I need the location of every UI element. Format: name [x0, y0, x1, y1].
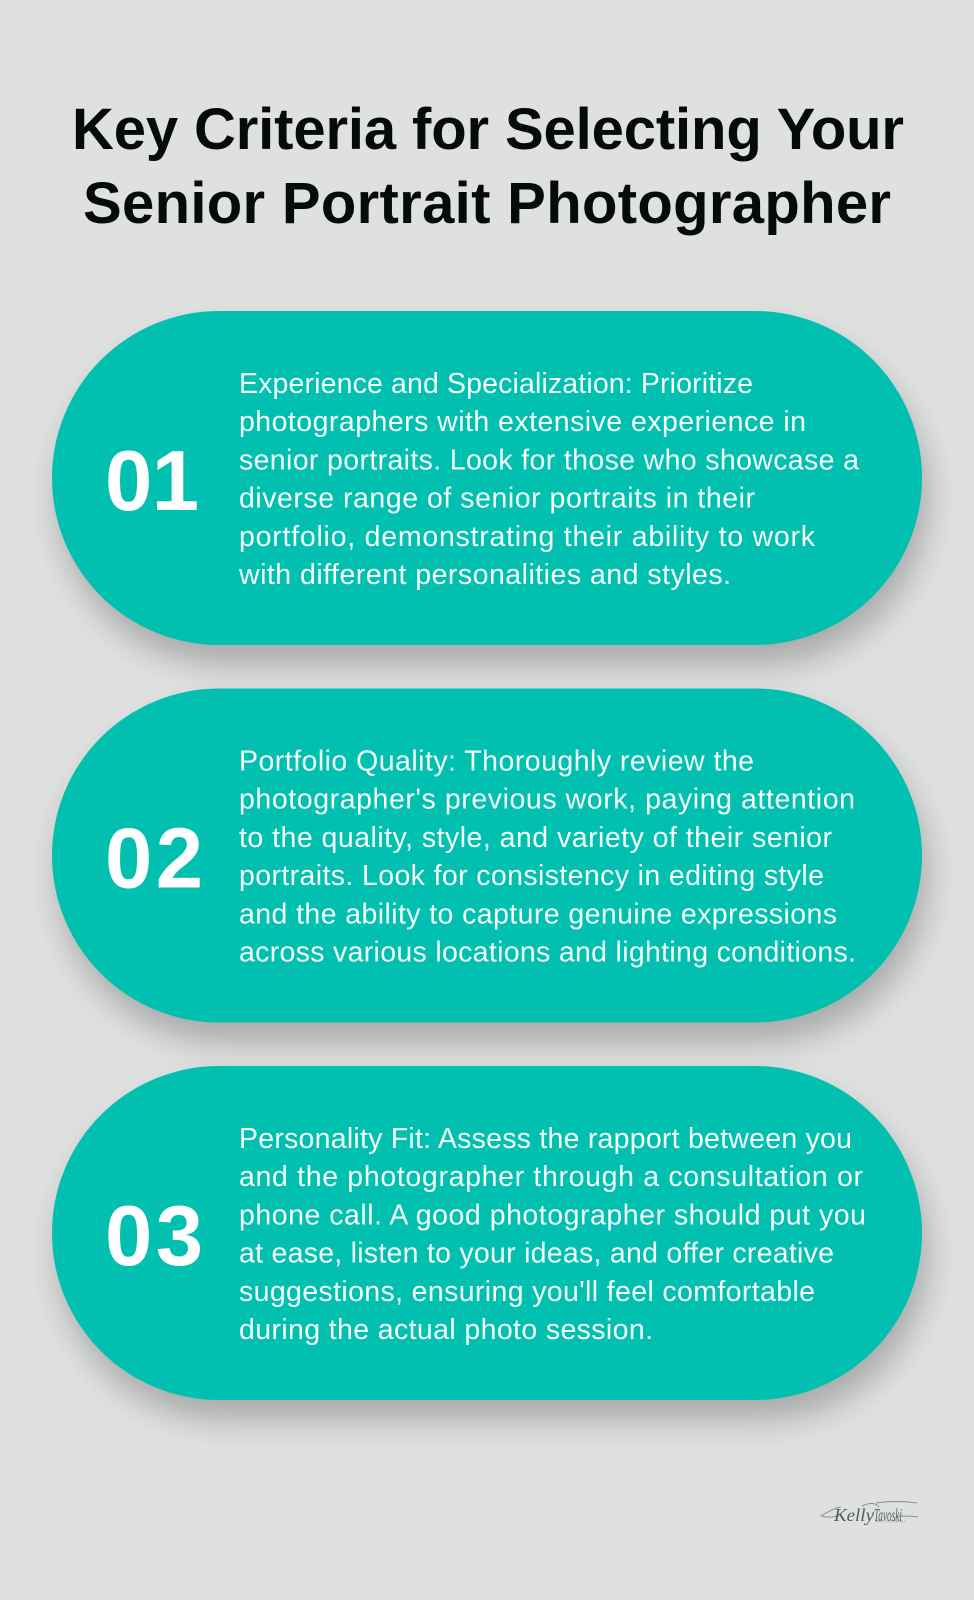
signature logo: Tavoski: [874, 1505, 902, 1525]
text block 02: and the ability to capture genuine expressions: [239, 898, 837, 930]
panel: 02 portfolio quality: [52, 688, 928, 1042]
text block 03: phone call. A good photographer should put you: [239, 1199, 866, 1231]
text block 02: across various locations and lighting conditions.: [239, 936, 856, 968]
text block 02: portraits. Look for consistency in editing style: [239, 860, 824, 892]
text block 01: photographers with extensive experience in: [239, 406, 806, 438]
pill background 02: [52, 688, 922, 1022]
panel: 01 experience and specialization: [52, 311, 928, 665]
signature logo: PHOTOGRAPHY: [876, 1520, 906, 1524]
title: [72, 97, 904, 236]
number 02: 02: [105, 812, 203, 906]
title: Senior Portrait Photographer: [83, 171, 891, 236]
text block 01: portfolio, demonstrating their ability to work: [239, 521, 816, 553]
text block 01: with different personalities and styles.: [238, 559, 731, 591]
text block 03: [239, 1123, 866, 1346]
text block 03: and the photographer through a consultation or: [239, 1161, 864, 1193]
pill background 01: [52, 311, 922, 645]
text block 02: [239, 746, 856, 968]
panel: 03 personality fit: [52, 1066, 928, 1420]
text block 02: to the quality, style, and variety of their senior: [239, 822, 832, 854]
text block 02: Portfolio Quality: Thoroughly review the: [239, 746, 754, 778]
number 01: 01: [105, 434, 199, 529]
text block 01: Experience and Specialization: Prioritize: [239, 368, 753, 400]
text block 01: [238, 368, 859, 591]
title: Key Criteria for Selecting Your: [72, 97, 904, 162]
signature logo: Kelly: [833, 1505, 874, 1525]
text block 03: suggestions, ensuring you'll feel comfortable: [239, 1276, 815, 1308]
number 03: 03: [105, 1189, 203, 1284]
text block 03: Personality Fit: Assess the rapport between you: [239, 1123, 852, 1155]
text block 03: during the actual photo session.: [239, 1314, 653, 1346]
pill background 03: [52, 1066, 922, 1400]
signature logo: [821, 1502, 918, 1525]
text block 01: senior portraits. Look for those who showcase a: [239, 444, 859, 476]
text block 02: photographer's previous work, paying attention: [239, 784, 855, 816]
text block 01: diverse range of senior portraits in their: [239, 483, 756, 515]
text block 03: at ease, listen to your ideas, and offer creative: [239, 1238, 834, 1270]
